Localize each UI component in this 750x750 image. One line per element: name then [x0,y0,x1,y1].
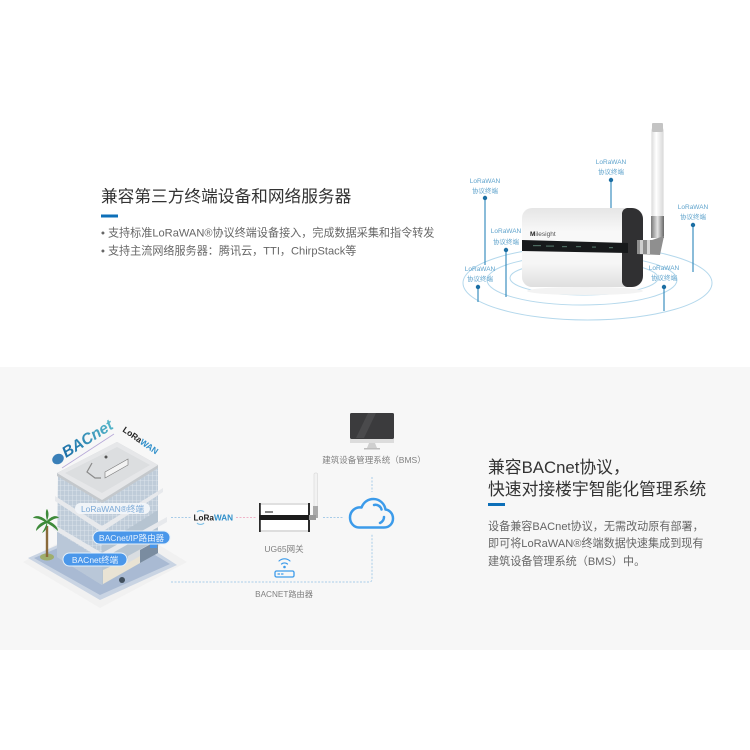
roof equipment [87,456,128,478]
terminal labels: 协议终端 [493,237,520,246]
antenna [637,123,664,255]
gateway device: Milesight [530,231,556,238]
heading: BACnet compatibility: 快速对接楼宇智能化管理系统 [488,480,706,499]
panel: top section background [0,0,750,367]
signal rings [463,246,712,320]
icon: cloud [350,499,393,528]
text block: feature bullets: • 支持主流网络服务器：腾讯云，TTI，ChirpStack等 [101,244,356,258]
gateway device [522,208,643,287]
icon: monitor [350,413,394,450]
heading: BACnet compatibility: 兼容BACnet协议， [488,458,630,477]
LoRaWAN logo on building: LoRaWAN [121,424,160,456]
ground shadow [23,515,187,608]
terminal labels: 协议终端 [651,273,678,282]
connector: building to cloud via router [171,534,372,582]
heading accent bar [101,214,118,218]
diagram: gateway with LoRaWAN terminals [463,123,712,320]
icon: router [275,559,294,577]
building right face [102,468,158,585]
connector: gateway to cloud [323,516,343,518]
terminal labels: 协议终端 [598,167,624,176]
text block: BACnet description: 建筑设备管理系统（BMS）中。 [488,554,645,568]
terminal labels: 协议终端 [472,186,498,195]
shopfront [103,553,140,584]
floor slabs [53,488,167,559]
icon: UG65 gateway [259,473,318,532]
illustration: smart building [23,416,187,608]
text block: BACnet description: 设备兼容BACnet协议，无需改动原有部署， [488,519,704,533]
label: BMS: 建筑设备管理系统（BMS） [322,455,426,465]
text block: BACnet description [488,519,704,568]
device reflection [527,287,643,295]
logo: LoRaWAN: LoRaWAN [194,514,233,522]
connector: LoRaWAN to gateway [236,516,256,518]
heading accent bar [488,503,505,506]
pill: BACnet terminal [63,553,127,566]
terminal labels: LoRaWAN [491,228,522,235]
base platform [28,522,177,600]
panel: BACnet section background [0,367,750,650]
text block: BACnet description: 即可将LoRaWAN®终端数据快速集成到现有 [488,536,703,550]
terminal labels: LoRaWAN [465,266,496,273]
heading: third-party compatibility: 兼容第三方终端设备和网络服务器 [101,187,352,206]
terminal labels: LoRaWAN [678,204,709,211]
logo: LoRaWAN [194,511,233,524]
text block: feature bullets [101,226,434,258]
label: UG65 gateway: UG65网关 [264,544,304,554]
BACnet logo: BACnet [59,416,117,461]
pill: BACnet/IP router [93,531,170,544]
connector: building to LoRaWAN [171,516,192,518]
text block: feature bullets: • 支持标准LoRaWAN®协议终端设备接入，完成数据采集和指令转发 [101,226,434,240]
label: BACnet router: BACNET路由器 [255,589,313,599]
pill: LoRaWAN terminal: LoRaWAN®终端 [81,504,145,514]
ground floor left [57,532,102,585]
pill: BACnet terminal: BACnet终端 [72,555,119,565]
terminal pins [476,178,695,311]
palm tree [33,509,59,560]
roof [57,442,158,503]
terminal labels: 协议终端 [467,274,494,283]
building left face [57,475,102,585]
terminal labels [465,159,709,283]
terminal labels: LoRaWAN [596,159,627,166]
terminal labels: LoRaWAN [649,265,680,272]
pill: BACnet/IP router: BACnet/IP路由器 [99,533,165,543]
terminal labels: 协议终端 [680,212,706,221]
heading: BACnet compatibility [488,458,706,499]
terminal labels: LoRaWAN [470,178,501,185]
connector: monitor to cloud [371,477,373,492]
